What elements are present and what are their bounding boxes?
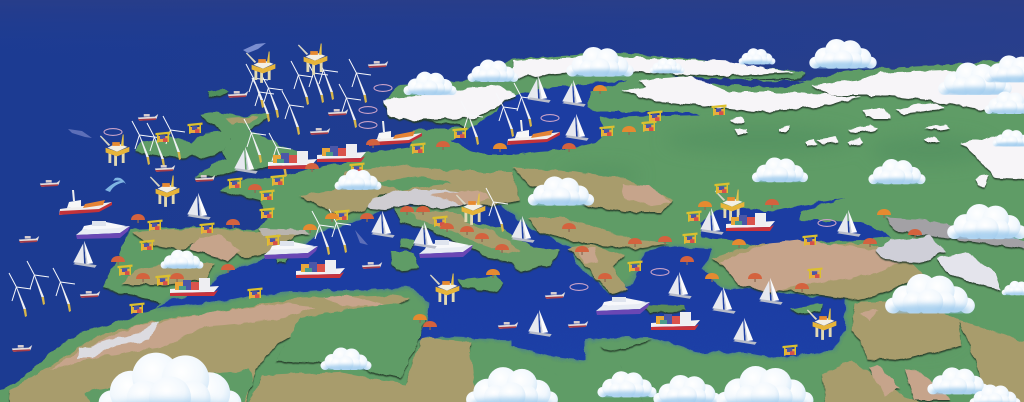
panel: Italy bbox=[393, 207, 560, 272]
Mediterranean Sea bbox=[157, 203, 845, 360]
group: aquaculture rings bbox=[104, 85, 836, 290]
group: offshore wind turbines bbox=[9, 56, 536, 317]
group: oil rigs bbox=[100, 44, 836, 340]
group: whales and dolphins bbox=[68, 43, 368, 245]
soft dark patches on the plains bbox=[560, 127, 990, 350]
group: cruise ships bbox=[76, 221, 650, 315]
group: coastal parasols bbox=[111, 85, 922, 330]
Black Sea bbox=[700, 198, 892, 245]
group: sailboats bbox=[73, 76, 861, 345]
panel: Iberian land layers bbox=[120, 228, 310, 285]
group: container ships bbox=[170, 144, 775, 330]
panel: African land layers bbox=[8, 295, 650, 402]
panel: northern snow fields bbox=[383, 58, 1024, 186]
panel: Great Britain and Ireland bbox=[135, 112, 298, 178]
group: research vessels bbox=[59, 120, 560, 215]
Baltic Sea bbox=[450, 80, 700, 155]
group: fishing boats bbox=[12, 61, 588, 352]
white sea inlet bbox=[672, 76, 805, 88]
panel: central European land layers bbox=[300, 165, 520, 215]
group: port cranes with containers bbox=[118, 104, 822, 356]
panel: Anatolia and Near East land layers bbox=[712, 240, 1024, 402]
panel: Caucasus and Zagros mountains bbox=[876, 218, 1024, 290]
panel: Balkan and Greek land layers bbox=[512, 168, 672, 292]
small island north of Scotland bbox=[207, 89, 228, 97]
panel: Mediterranean islands bbox=[277, 238, 822, 352]
